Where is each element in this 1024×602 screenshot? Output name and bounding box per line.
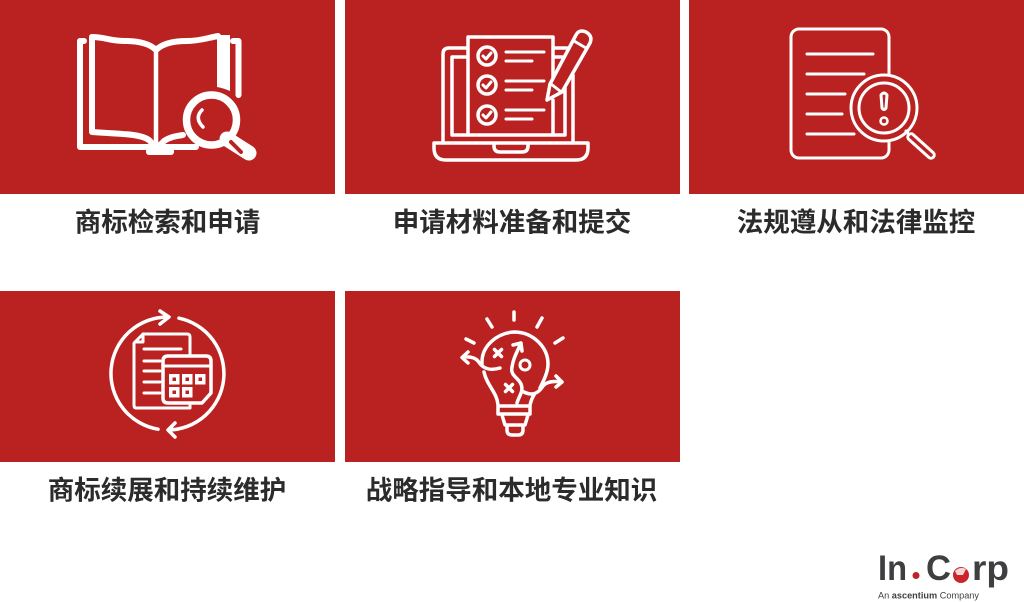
label: strategic guidance: 战略指导和本地专业知识 [366,476,657,506]
icon: open book with magnifier [80,35,249,153]
logo: InCorp: In [878,549,907,588]
label: renewal and maintenance: 商标续展和持续维护 [48,476,286,506]
label: application materials: 申请材料准备和提交 [393,208,631,238]
icon: light bulb with strategy arrows [462,312,563,435]
logo: InCorp: rp [972,549,1009,588]
logo: InCorp [878,549,1009,600]
icon: document with alert magnifier [791,29,931,158]
logo: InCorp: An ascentium Company [878,590,979,600]
icon: laptop with checklist and pencil [434,31,591,160]
panel: trademark search [0,0,335,194]
label: trademark search: 商标检索和申请 [75,208,260,238]
panel: renewal and maintenance [0,291,335,462]
icon: renewal cycle with document and calendar [111,311,224,437]
label: regulatory compliance: 法规遵从和法律监控 [737,208,975,238]
logo: InCorp: C [926,549,951,588]
panel: application materials [345,0,680,194]
panel: regulatory compliance [689,0,1024,194]
panel: strategic guidance [345,291,680,462]
